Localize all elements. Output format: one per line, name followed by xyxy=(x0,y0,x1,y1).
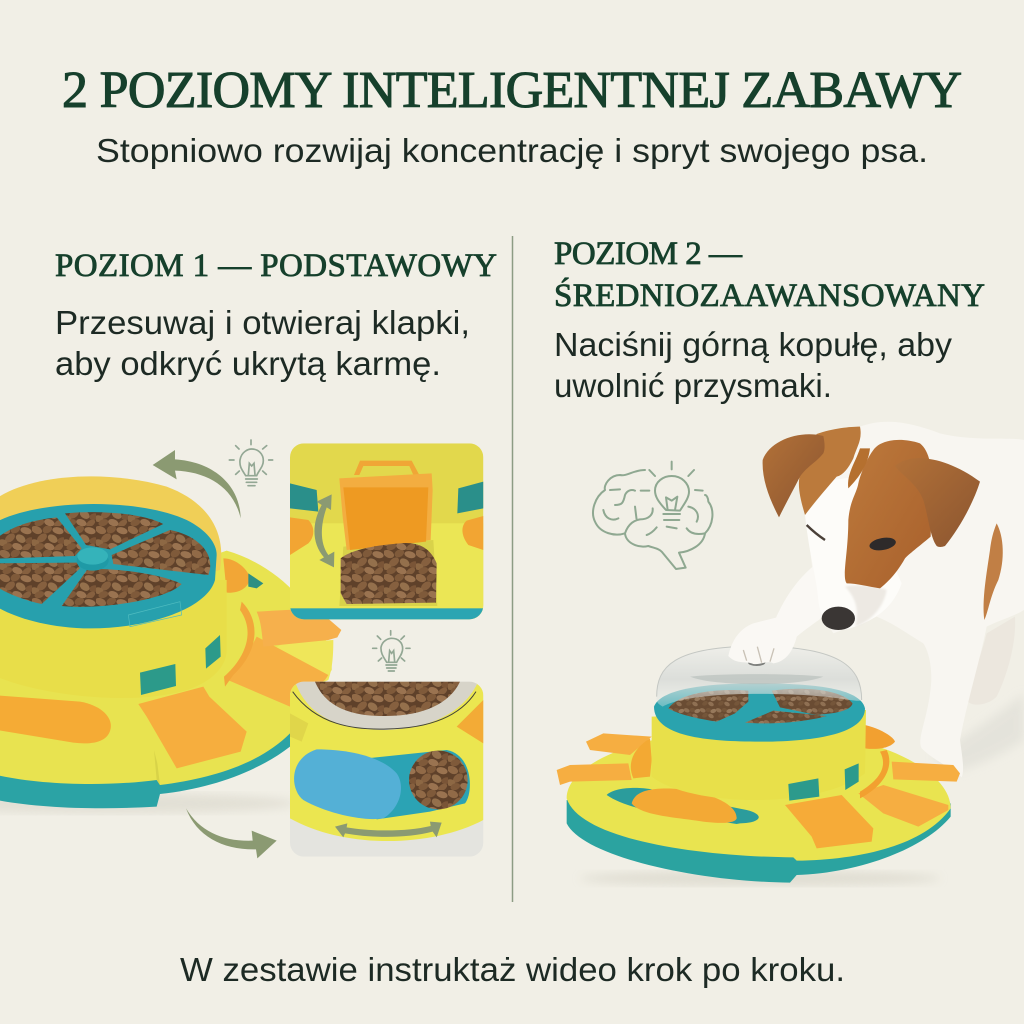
right scene: dog and toy xyxy=(557,422,1024,886)
arrow: curved bottom xyxy=(186,808,277,858)
teal bowl xyxy=(0,504,217,628)
toy cylinder xyxy=(652,710,866,800)
kibble circle xyxy=(409,751,468,809)
title: 2 POZIOMY INTELIGENTNEJ ZABAWY xyxy=(62,62,962,119)
text: level 2 description: Naciśnij górną kopułę, aby xyxy=(554,326,953,363)
eyes xyxy=(868,536,897,552)
dog body xyxy=(807,422,1024,777)
dog xyxy=(728,422,1024,777)
double arrow xyxy=(314,494,334,567)
translucent rim xyxy=(0,476,221,603)
teal slot xyxy=(367,750,470,819)
inset: sliding lid xyxy=(290,682,483,857)
dog face white xyxy=(805,477,902,629)
double arrow xyxy=(335,822,442,837)
heading: level 2: POZIOM 2 — xyxy=(554,236,743,272)
toy base xyxy=(567,728,951,883)
flap xyxy=(339,473,433,550)
kibble xyxy=(0,512,210,607)
right ear xyxy=(895,458,980,547)
toy base xyxy=(0,551,333,808)
toy slot and lid xyxy=(607,788,759,824)
dog side patch xyxy=(984,523,1003,620)
left puzzle toy xyxy=(0,440,483,858)
kibble pile xyxy=(341,543,437,604)
dog foreleg and paw xyxy=(728,563,823,664)
brown head patch xyxy=(845,440,932,588)
brown left of blaze xyxy=(799,427,861,515)
toy windows xyxy=(788,763,859,801)
toy flaps xyxy=(557,725,960,848)
clear dome xyxy=(657,646,862,707)
orange flaps xyxy=(0,558,341,768)
brown strip xyxy=(848,448,870,488)
subtitle: Stopniowo rozwijaj koncentrację i spryt swojego psa. xyxy=(96,132,928,169)
text: level 1 description xyxy=(55,304,470,382)
icon: light bulb xyxy=(229,440,273,486)
central cylinder xyxy=(0,580,227,698)
text: level 1 description: aby odkryć ukrytą karmę. xyxy=(55,345,441,382)
footer text: W zestawie instruktaż wideo krok po kroku. xyxy=(180,951,845,988)
left ear xyxy=(763,434,825,517)
heading: level 2: ŚREDNIOZAAWANSOWANY xyxy=(554,276,985,314)
floor shadow xyxy=(933,693,1024,773)
icon: brain with bulb xyxy=(593,462,712,569)
icon: light bulb 2 xyxy=(373,631,410,671)
windows xyxy=(140,635,221,695)
central hub xyxy=(77,547,109,571)
heading: level 1: POZIOM 1 — PODSTAWOWY xyxy=(55,248,497,284)
text: level 2 description xyxy=(554,326,953,404)
paw on dome xyxy=(728,617,797,664)
inset: opening flap xyxy=(290,443,483,622)
flap handle xyxy=(354,461,419,475)
dog muzzle shading xyxy=(845,585,887,627)
text: level 1 description: Przesuwaj i otwieraj klapki, xyxy=(55,304,470,341)
toy shadow xyxy=(0,793,297,813)
arrow: curved top xyxy=(153,450,241,518)
dog far hind leg xyxy=(967,617,1015,705)
text: level 2 description: uwolnić przysmaki. xyxy=(554,367,832,404)
nose xyxy=(822,607,855,630)
blue lid xyxy=(294,749,401,819)
teal bowl xyxy=(654,683,865,742)
kibble xyxy=(668,689,853,723)
heading: level 2 xyxy=(554,236,985,314)
